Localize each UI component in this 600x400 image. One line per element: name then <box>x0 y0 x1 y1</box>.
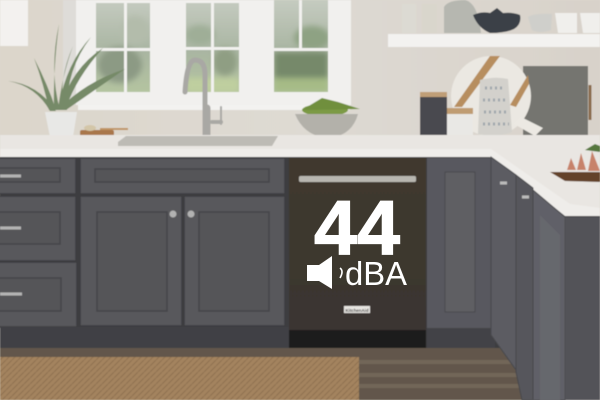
noise level number: 44 <box>314 186 400 272</box>
center drawer and doors <box>80 158 285 326</box>
plinth <box>0 327 289 348</box>
gray tray <box>523 66 590 136</box>
dishwasher <box>289 158 426 348</box>
sound wave tick <box>340 268 342 278</box>
speaker icon <box>307 256 332 289</box>
dishwasher handle <box>299 176 416 182</box>
dishwasher badge <box>344 306 370 313</box>
right base cabinet <box>427 158 495 348</box>
plant pot <box>45 112 77 137</box>
side cabinets <box>491 157 600 400</box>
noise unit: dBA <box>345 255 407 292</box>
drawer handles <box>0 176 22 294</box>
cabinet knobs <box>170 174 440 218</box>
aloe plant <box>8 24 125 111</box>
dark cabinet backing <box>0 155 600 348</box>
rug <box>0 357 359 400</box>
window <box>63 0 351 110</box>
dishwasher badge: KitchenAid <box>346 308 369 313</box>
canisters <box>420 92 473 139</box>
floor <box>0 348 600 400</box>
cutting board with carrots <box>550 144 600 182</box>
left drawers <box>0 158 77 327</box>
countertop <box>0 135 600 216</box>
faucet <box>185 60 221 135</box>
wall <box>0 0 600 160</box>
round cutting board <box>451 56 543 136</box>
floor planks <box>359 362 560 386</box>
upper cabinet <box>0 0 28 46</box>
bowl of greens <box>295 98 378 141</box>
shelf with dishware <box>388 0 600 47</box>
wooden dish <box>80 125 128 136</box>
